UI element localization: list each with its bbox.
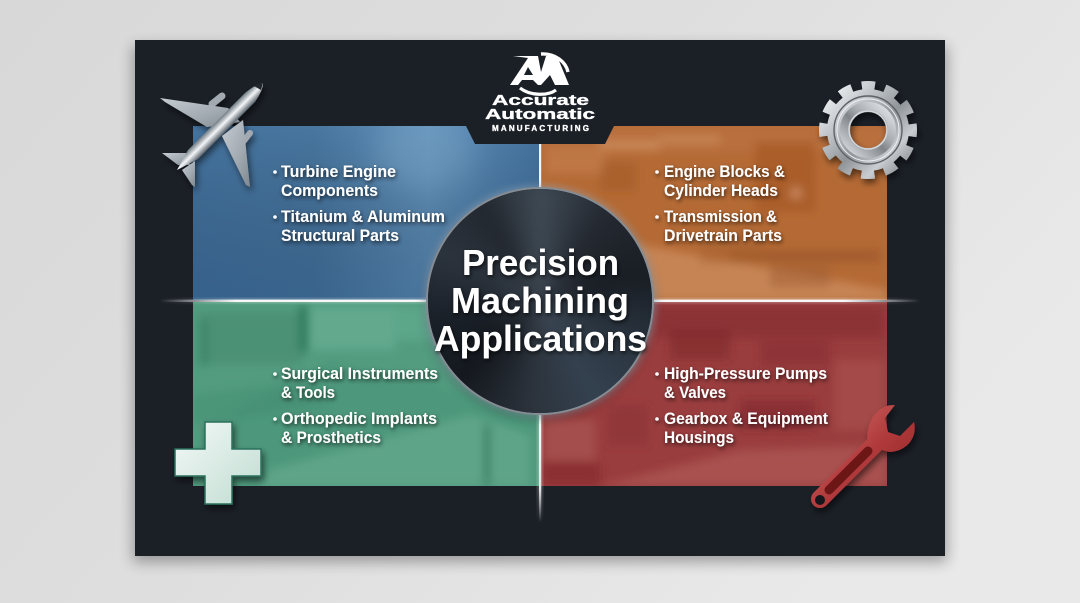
industrial list: Gearbox & Equipment [664, 410, 828, 428]
aerospace list: Turbine Engine [281, 163, 396, 181]
icon: airplane [160, 83, 263, 187]
logo mark [510, 54, 569, 94]
automotive list: Drivetrain Parts [664, 227, 782, 245]
medical list: & Prosthetics [281, 429, 381, 447]
industrial list [655, 365, 828, 447]
panel: aerospace quadrant background [193, 110, 539, 300]
automotive list [655, 163, 785, 245]
aerospace list: Structural Parts [281, 227, 399, 245]
logo wordmark: MANUFACTURING [492, 124, 589, 133]
medical list: Surgical Instruments [281, 365, 438, 383]
automotive list: Cylinder Heads [664, 182, 778, 200]
poster panel [135, 40, 945, 556]
icon: medical cross [175, 422, 261, 504]
logo wordmark [485, 92, 595, 133]
panel: automotive quadrant background [541, 126, 887, 300]
industrial list: & Valves [664, 384, 726, 402]
logo [485, 54, 595, 133]
aerospace list [273, 163, 445, 245]
vertical light streak [538, 126, 542, 522]
automotive list: Engine Blocks & [664, 163, 785, 181]
title: Machining [451, 280, 629, 321]
logo wordmark: Automatic [485, 106, 595, 123]
aerospace list: Components [281, 182, 378, 200]
logo tab [466, 126, 614, 144]
title [434, 242, 647, 359]
industrial list: Housings [664, 429, 734, 447]
logo wordmark: Accurate [492, 92, 589, 109]
title: Precision [462, 242, 619, 283]
panel: industrial quadrant background [541, 302, 887, 486]
panel: medical quadrant background [193, 302, 539, 486]
central circle [426, 187, 654, 415]
icon: wrench [815, 405, 915, 505]
medical list [273, 365, 438, 447]
poster shadow [133, 46, 947, 562]
automotive list: Transmission & [664, 208, 777, 226]
medical list: Orthopedic Implants [281, 410, 437, 428]
medical list: & Tools [281, 384, 335, 402]
industrial list: High-Pressure Pumps [664, 365, 827, 383]
title: Applications [434, 318, 647, 359]
aerospace list: Titanium & Aluminum [281, 208, 445, 226]
icon: gear [824, 86, 912, 174]
horizontal light streak [160, 299, 920, 303]
